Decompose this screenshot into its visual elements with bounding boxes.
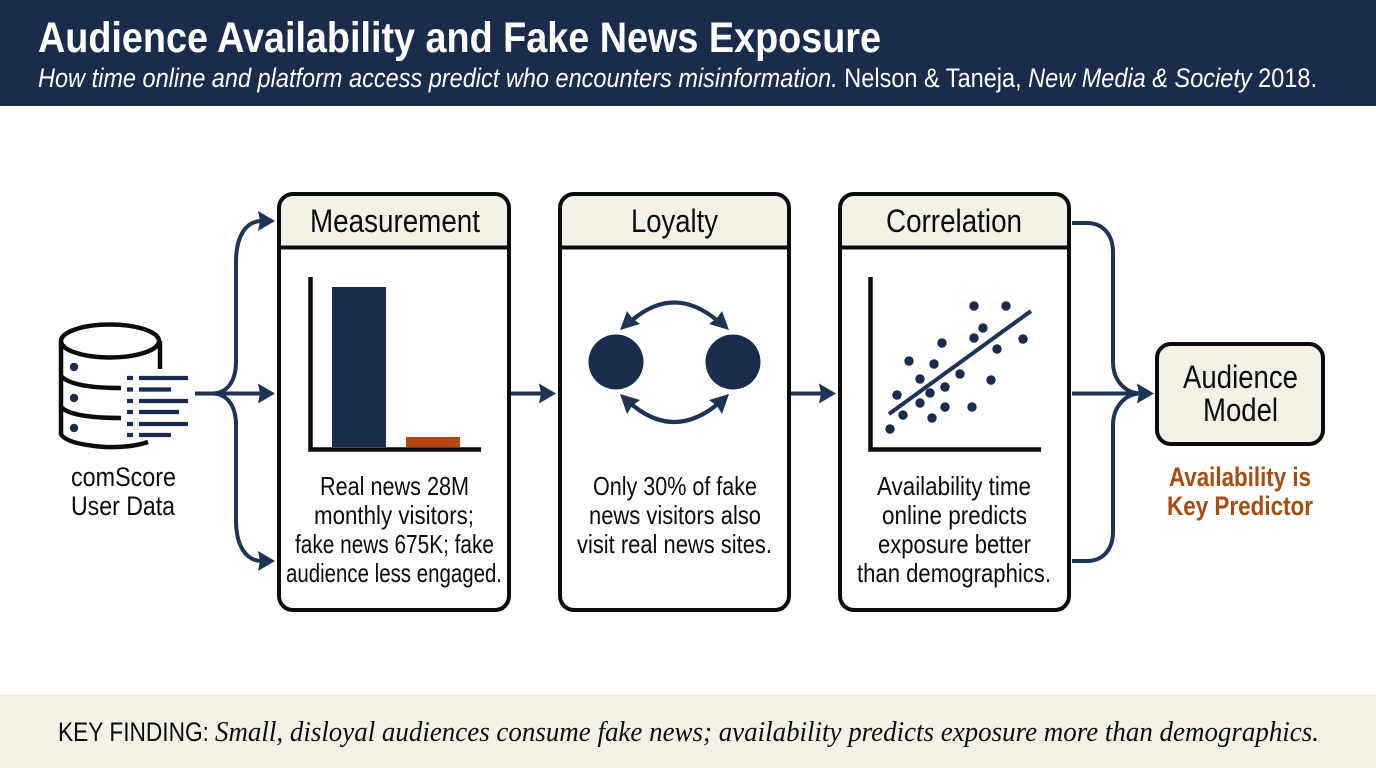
- callout: availability is key predictor: [1167, 462, 1313, 521]
- text: loyalty body: news visitors also: [589, 500, 761, 530]
- text: loyalty body: Only 30% of fake: [593, 471, 757, 501]
- footer: key finding: KEY FINDING:: [58, 717, 209, 747]
- footer: key finding: Small, disloyal audiences consume fake news; availability predicts exposure more than demographics.: [215, 717, 1319, 748]
- panel: measurement: [279, 194, 509, 610]
- text: loyalty body: [577, 471, 772, 559]
- label: comScore User Data: comScore: [71, 462, 176, 492]
- box: audience model: [1157, 344, 1323, 444]
- text: correlation body: online predicts: [882, 500, 1027, 530]
- arrow: loyalty to correlation: [791, 384, 836, 404]
- arrow: measurement to loyalty: [511, 384, 556, 404]
- heading: measurement: Measurement: [310, 203, 480, 239]
- heading: loyalty: Loyalty: [631, 203, 718, 239]
- icon: database with data rows: [61, 324, 188, 447]
- box: audience model: Audience: [1183, 359, 1298, 395]
- text: correlation body: [857, 471, 1051, 588]
- icon: two circles with cycling arrows: [588, 302, 760, 422]
- arrows: correlation to audience model: [1072, 223, 1154, 561]
- subtitle: How time online and platform access predict who encounters misinformation. Nelson & Taneja, New Media & Society 2018.: [38, 63, 1317, 93]
- text: correlation body: than demographics.: [857, 558, 1051, 588]
- text: correlation body: Availability time: [877, 471, 1031, 501]
- arrows: data source to measurement: [195, 211, 275, 571]
- bar chart: real vs fake news visitors: [310, 277, 481, 450]
- text: measurement body: fake news 675K; fake: [295, 529, 494, 559]
- label: comScore User Data: [71, 462, 176, 521]
- callout: availability is key predictor: Availability is: [1169, 462, 1311, 492]
- heading: correlation: Correlation: [886, 203, 1022, 239]
- title: Audience Availability and Fake News Exposure: [38, 14, 881, 62]
- text: measurement body: [286, 471, 502, 588]
- text: measurement body: audience less engaged.: [286, 558, 502, 588]
- text: correlation body: exposure better: [878, 529, 1031, 559]
- box: audience model: Model: [1203, 392, 1278, 428]
- footer: key finding: [0, 694, 1376, 768]
- callout: availability is key predictor: Key Predictor: [1167, 491, 1313, 521]
- panel: correlation: [840, 194, 1069, 610]
- scatter plot: availability vs exposure: [870, 277, 1041, 450]
- text: measurement body: monthly visitors;: [314, 500, 474, 530]
- header banner: [0, 0, 1376, 106]
- text: measurement body: Real news 28M: [320, 471, 469, 501]
- label: comScore User Data: User Data: [71, 491, 176, 521]
- panel: loyalty: [560, 194, 789, 610]
- text: loyalty body: visit real news sites.: [577, 529, 772, 559]
